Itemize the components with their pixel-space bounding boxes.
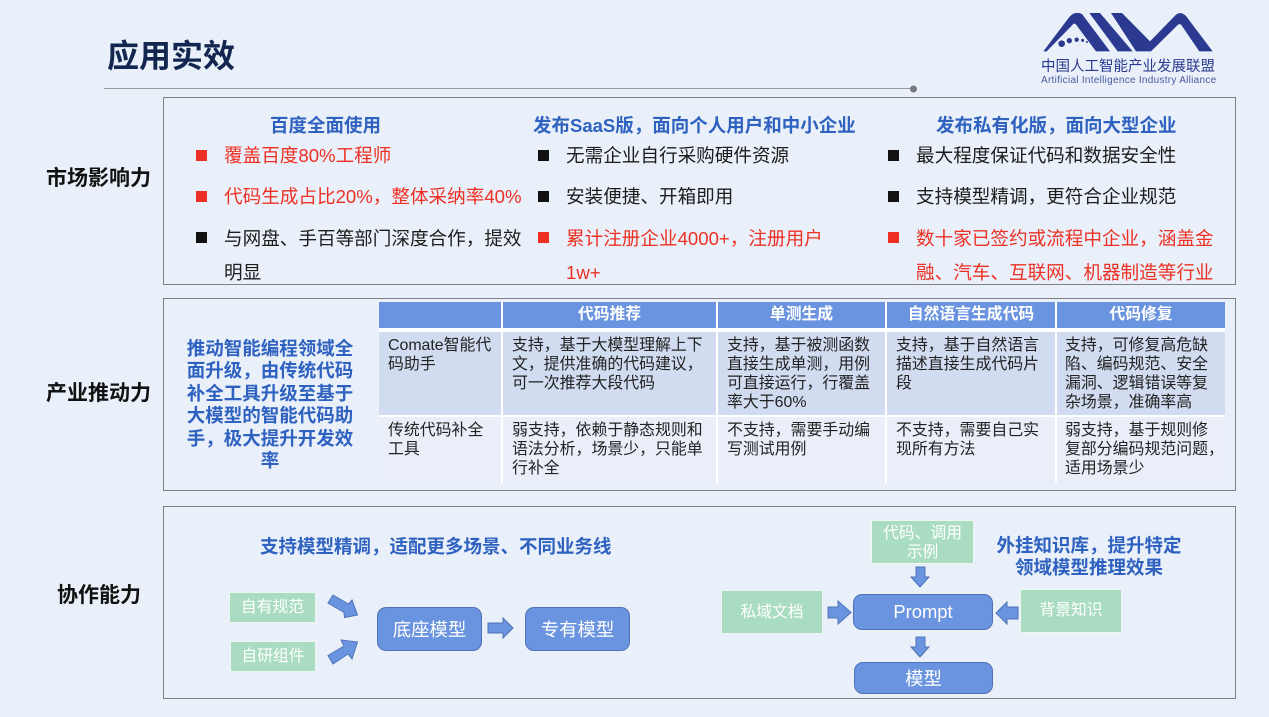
- row 2 repair: 复部分编码规范问题，: [1065, 441, 1224, 458]
- row 1 recommendation: 可一次推荐大段代码: [512, 375, 655, 392]
- row 1 unit test: 直接生成单测，用例: [727, 356, 870, 373]
- box: code examples: 代码、调用: [883, 525, 962, 542]
- row 2 unit test: 不支持，需要手动编: [727, 422, 870, 439]
- label: market influence: 市场影响力: [46, 167, 151, 190]
- industry summary text: [187, 338, 353, 471]
- row 2 unit test: 写测试用例: [727, 441, 806, 458]
- box: base model: 底座模型: [393, 619, 466, 640]
- logo mark: [1043, 12, 1213, 52]
- row 2 recommendation: 弱支持，依赖于静态规则和: [512, 422, 703, 439]
- panel: market influence: [163, 97, 1236, 285]
- row 1 repair: 陷、编码规范、安全: [1065, 356, 1208, 373]
- box: model: 模型: [905, 668, 942, 689]
- label: collaboration: 协作能力: [57, 584, 141, 607]
- row 2 nl: [887, 417, 1055, 483]
- box: private docs: [721, 590, 823, 634]
- row 1 unit test: [718, 332, 885, 415]
- header: code recommendation: [503, 302, 716, 328]
- bullet 3: [888, 228, 1214, 282]
- row 2 repair: 弱支持，基于规则修: [1065, 422, 1208, 439]
- box: model: [854, 662, 993, 694]
- panel: collaboration: [163, 506, 1236, 699]
- box: own standards: [229, 592, 316, 623]
- bullet 3: 1w+: [566, 262, 601, 282]
- row 2 nl: 现所有方法: [896, 441, 975, 458]
- bullet 3: [196, 228, 522, 282]
- column 2 bullets: [538, 145, 823, 282]
- bullet 3: 与网盘、手百等部门深度合作，提效: [224, 228, 522, 249]
- box: code examples: 示例: [907, 544, 938, 561]
- title divider: [104, 86, 917, 92]
- comparison table: [379, 302, 1225, 483]
- row 2 unit test: [718, 417, 885, 483]
- bullet 1: 覆盖百度80%工程师: [224, 145, 391, 166]
- title: 应用实效: [107, 38, 235, 74]
- row 2 name: [379, 417, 501, 483]
- bullet 1: 无需企业自行采购硬件资源: [566, 145, 789, 166]
- column 3 bullets: [888, 145, 1214, 282]
- panel: industry push: [163, 298, 1236, 491]
- column 3 heading: 发布私有化版，面向大型企业: [936, 115, 1177, 136]
- row 1 name: 码助手: [388, 356, 436, 373]
- bullet 3: 累计注册企业4000+，注册用户: [566, 228, 823, 249]
- row 2 recommendation: [503, 417, 716, 483]
- row 1 nl: [887, 332, 1055, 415]
- header: code repair: [1057, 302, 1225, 328]
- row 1 repair: [1057, 332, 1225, 415]
- row 1 repair: 漏洞、逻辑错误等复: [1065, 375, 1208, 392]
- row 1 recommendation: 文，提供准确的代码建议，: [512, 356, 703, 373]
- header: unit test: [718, 302, 885, 328]
- logo chinese name: 中国人工智能产业发展联盟: [1041, 59, 1215, 75]
- header: unit test: 单测生成: [770, 306, 833, 323]
- logo english name: Artificial Intelligence Industry Alliance: [1041, 75, 1216, 86]
- row 2 nl: 不支持，需要自己实: [896, 422, 1039, 439]
- row 1 unit test: 率大于60%: [727, 394, 806, 411]
- industry summary text: 率: [261, 450, 279, 471]
- column 1 bullets: [196, 145, 522, 282]
- box: dedicated model: [525, 607, 630, 651]
- header: nl to code: [887, 302, 1055, 328]
- logo: [1041, 12, 1216, 86]
- row 1 nl: 支持，基于自然语言: [896, 337, 1039, 354]
- box: base model: [377, 607, 482, 651]
- tuning heading: 支持模型精调，适配更多场景、不同业务线: [260, 536, 612, 557]
- knowledge base heading: 领域模型推理效果: [1015, 557, 1163, 578]
- row 1 nl: 描述直接生成代码片: [896, 356, 1039, 373]
- row 2 name: 工具: [388, 441, 420, 458]
- box: private docs: 私域文档: [740, 604, 804, 621]
- bullet 2: 代码生成占比20%，整体采纳率40%: [224, 186, 522, 207]
- box: own components: 自研组件: [241, 648, 305, 665]
- header: nl to code: 自然语言生成代码: [908, 306, 1034, 323]
- row 1 recommendation: [503, 332, 716, 415]
- industry summary text: 手，极大提升开发效: [187, 428, 353, 449]
- column 2 heading: 发布SaaS版，面向个人用户和中小企业: [533, 115, 856, 136]
- box: dedicated model: 专有模型: [541, 619, 614, 640]
- bullet 2: 支持模型精调，更符合企业规范: [916, 186, 1176, 207]
- row 2 recommendation: 语法分析，场景少，只能单: [512, 441, 703, 458]
- row 1 unit test: 可直接运行，行覆盖: [727, 375, 870, 392]
- header: code recommendation: 代码推荐: [578, 306, 641, 323]
- knowledge base heading: [996, 535, 1182, 578]
- bullet 3: 融、汽车、互联网、机器制造等行业: [916, 262, 1214, 282]
- header: empty: [379, 302, 501, 328]
- row 1 unit test: 支持，基于被测函数: [727, 337, 870, 354]
- header: code repair: 代码修复: [1109, 306, 1173, 323]
- bullet 3: 数十家已签约或流程中企业，涵盖金: [916, 228, 1214, 249]
- bullet 1: 最大程度保证代码和数据安全性: [916, 145, 1176, 166]
- industry summary text: 补全工具升级至基于: [187, 383, 353, 404]
- row 1 recommendation: 支持，基于大模型理解上下: [512, 337, 703, 354]
- bullet 3: 明显: [224, 262, 261, 282]
- box: background knowledge: 背景知识: [1039, 602, 1103, 619]
- row 2 repair: 适用场景少: [1065, 460, 1144, 477]
- box: prompt: Prompt: [893, 601, 953, 622]
- row 1 nl: 段: [896, 375, 912, 392]
- row 2 recommendation: 行补全: [512, 460, 560, 477]
- box: own components: [230, 641, 316, 672]
- knowledge base heading: 外挂知识库，提升特定: [996, 535, 1182, 556]
- box: prompt: [853, 594, 993, 630]
- industry summary text: 推动智能编程领域全: [187, 338, 353, 359]
- column 1 heading: 百度全面使用: [270, 115, 381, 136]
- label: industry push: 产业推动力: [46, 382, 151, 405]
- box: code examples: [871, 520, 974, 564]
- industry summary text: 大模型的智能代码助: [187, 405, 353, 426]
- industry summary text: 面升级，由传统代码: [187, 360, 353, 381]
- bullet 3: [538, 228, 823, 282]
- row 1 repair: 杂场景，准确率高: [1065, 394, 1192, 411]
- row 2 repair: [1057, 417, 1225, 483]
- box: own standards: 自有规范: [241, 599, 304, 616]
- box: background knowledge: [1020, 589, 1122, 633]
- row 1 repair: 支持，可修复高危缺: [1065, 337, 1208, 354]
- row 1 name: Comate智能代: [388, 337, 491, 354]
- row 2 name: 传统代码补全: [388, 422, 483, 439]
- row 1 name: [379, 332, 501, 415]
- bullet 2: 安装便捷、开箱即用: [566, 186, 733, 207]
